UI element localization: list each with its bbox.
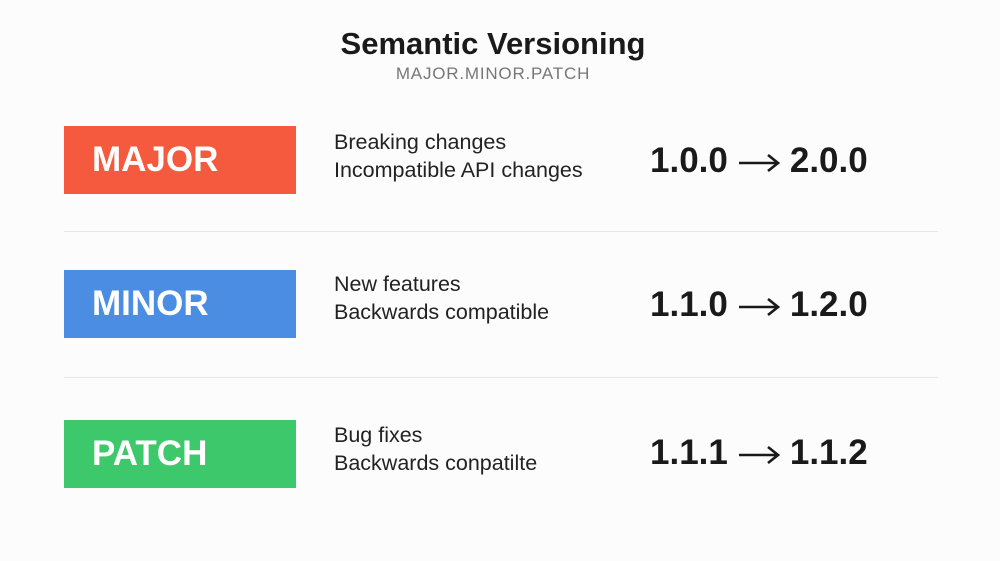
label: PATCH	[64, 420, 296, 488]
label: MAJOR	[64, 126, 296, 194]
title: Semantic Versioning	[341, 26, 645, 61]
example: minor: 1.1.0 1.2.0	[650, 285, 868, 324]
label: MAJOR: MAJOR	[92, 140, 218, 179]
description: minor: Backwards compatible	[334, 300, 549, 324]
subtitle: MAJOR.MINOR.PATCH	[396, 64, 590, 83]
example: patch: 1.1.1 1.1.2	[650, 433, 868, 472]
description: patch	[334, 423, 537, 475]
description: major	[334, 130, 583, 182]
description: minor	[334, 272, 549, 324]
label: MINOR: MINOR	[92, 284, 209, 323]
label: MINOR	[64, 270, 296, 338]
description: major: Breaking changes	[334, 130, 506, 154]
description: major: Incompatible API changes	[334, 158, 583, 182]
label: PATCH: PATCH	[92, 434, 207, 473]
description: patch: Bug fixes	[334, 423, 422, 447]
description: minor: New features	[334, 272, 461, 296]
example: major: 1.0.0 2.0.0	[650, 141, 868, 180]
description: patch: Backwards conpatilte	[334, 451, 537, 475]
